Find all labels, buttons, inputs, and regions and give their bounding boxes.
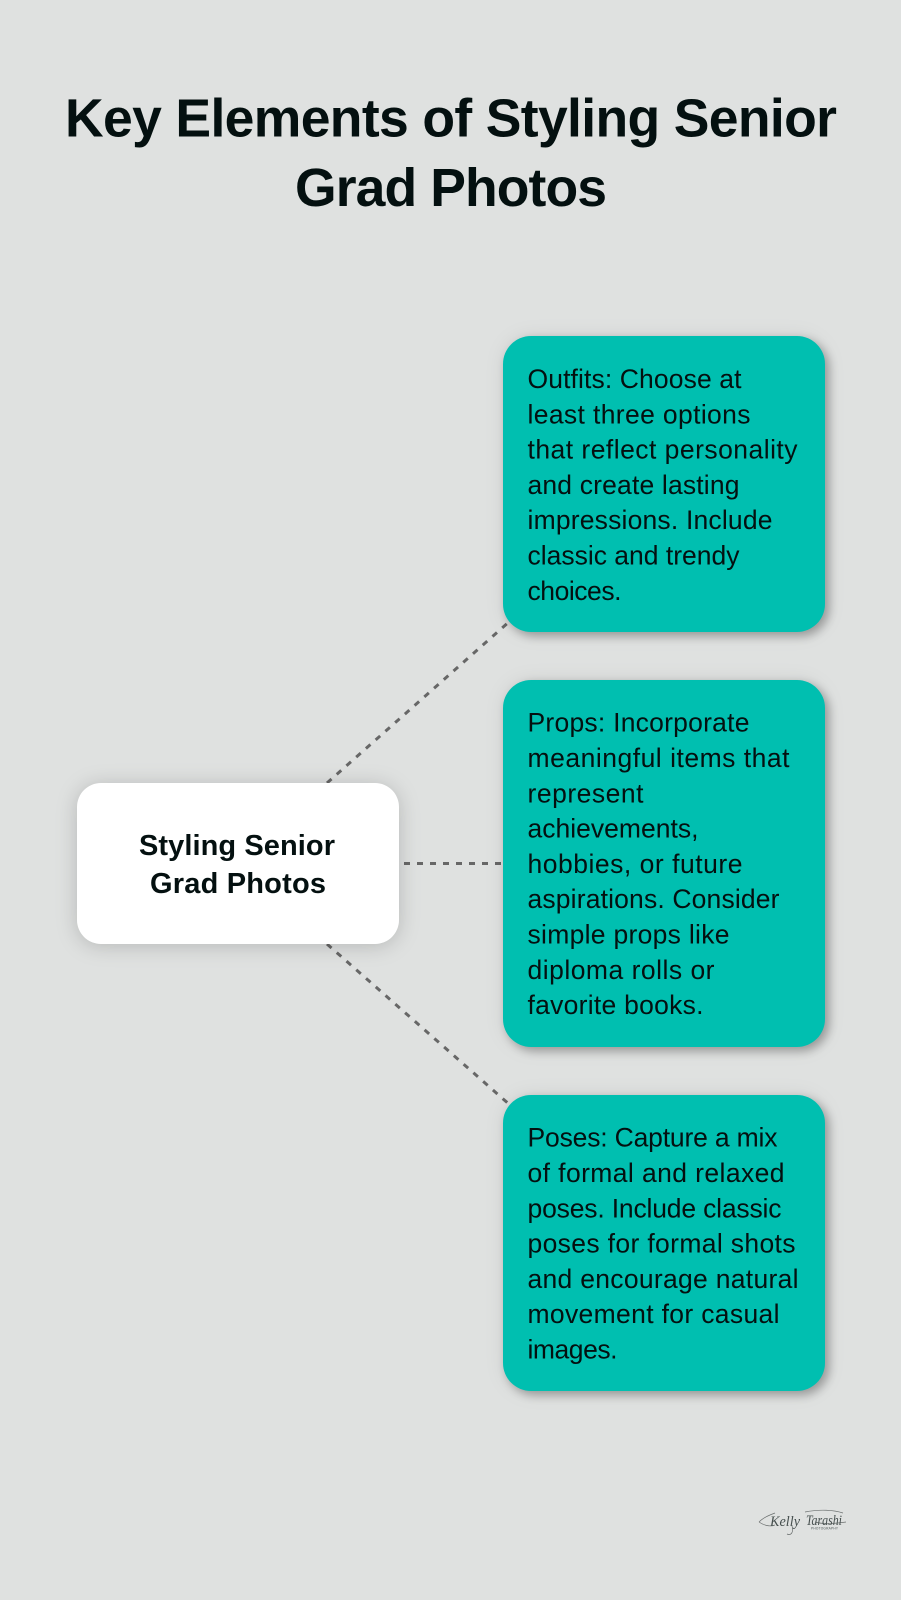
props text: meaningful items that	[528, 743, 790, 773]
outfits text: least three options	[528, 399, 750, 429]
outfits text: and create lasting	[528, 470, 740, 500]
outfits text: that reflect personality	[528, 435, 798, 465]
poses text	[528, 1123, 798, 1364]
logo: signature: Tarashi	[806, 1513, 842, 1529]
outfits text: classic and trendy	[528, 540, 740, 570]
logo: signature: Kelly	[769, 1514, 800, 1530]
connector: center to outfits	[327, 621, 510, 783]
title	[65, 90, 837, 218]
poses text: movement for casual	[528, 1299, 780, 1329]
props text: achievements,	[528, 814, 698, 844]
outfits card background	[503, 336, 825, 632]
center node label	[139, 830, 335, 900]
panel: outfits	[503, 336, 825, 632]
props text	[528, 708, 790, 1020]
logo: signature: PHOTOGRAPHY	[811, 1526, 839, 1530]
outfits text	[528, 364, 798, 606]
poses text: poses for formal shots	[528, 1229, 796, 1259]
outfits text: Outfits: Choose at	[528, 364, 742, 394]
title: Grad Photos	[295, 159, 607, 218]
title: Key Elements of Styling Senior	[65, 90, 837, 148]
connector: center to poses	[327, 944, 510, 1105]
props text: Props: Incorporate	[528, 708, 750, 738]
poses text: of formal and relaxed	[528, 1158, 784, 1188]
panel: center node	[77, 783, 399, 944]
props text: hobbies, or future	[528, 849, 742, 879]
poses text: Poses: Capture a mix	[528, 1123, 778, 1153]
props text: aspirations. Consider	[528, 884, 780, 914]
props text: diploma rolls or	[528, 955, 715, 985]
connector: center to props	[404, 862, 503, 865]
poses text: images.	[528, 1334, 618, 1364]
poses text: poses. Include classic	[528, 1193, 782, 1223]
center node label: Grad Photos	[150, 868, 326, 900]
logo: signature	[759, 1510, 846, 1535]
panel: poses	[503, 1095, 825, 1391]
center node background	[77, 783, 399, 944]
outfits text: impressions. Include	[528, 505, 772, 535]
props text: represent	[528, 778, 644, 808]
center node label: Styling Senior	[139, 830, 335, 862]
outfits text: choices.	[528, 576, 622, 606]
poses text: and encourage natural	[528, 1264, 798, 1294]
poses card background	[503, 1095, 825, 1391]
props card background	[503, 680, 825, 1047]
props text: simple props like	[528, 920, 730, 950]
panel: props	[503, 680, 825, 1047]
props text: favorite books.	[528, 990, 704, 1020]
